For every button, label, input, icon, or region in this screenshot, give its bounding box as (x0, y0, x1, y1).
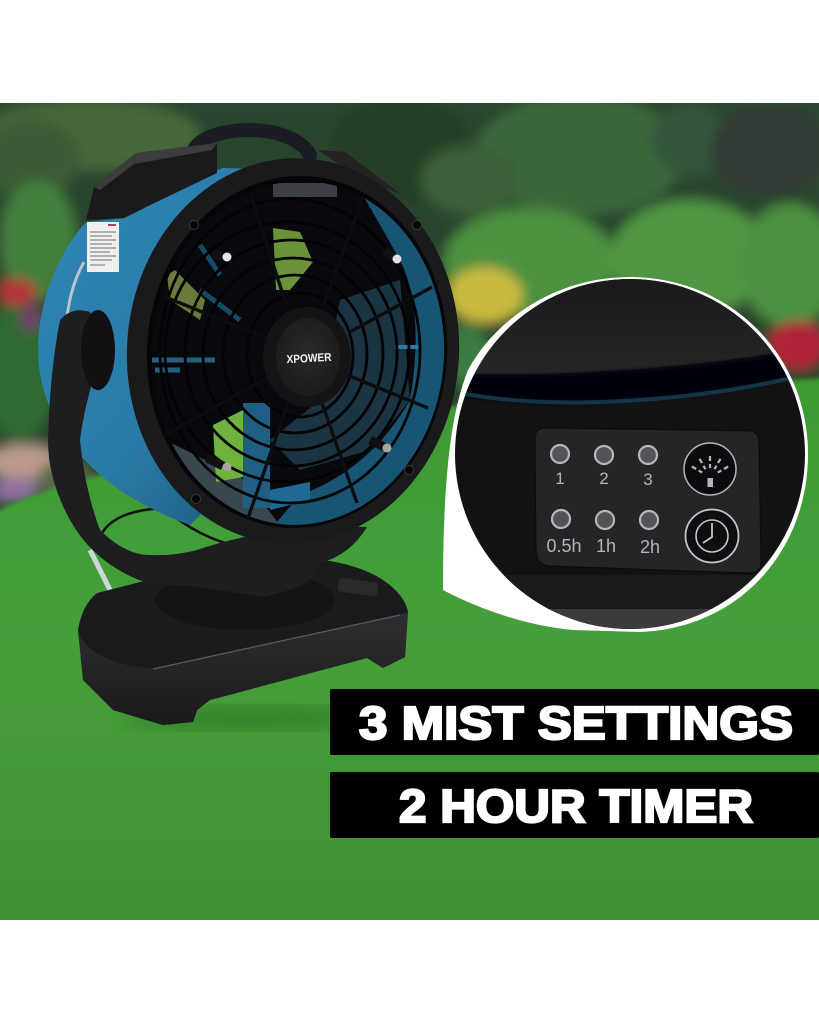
label bar: 2 hour timer (330, 772, 819, 838)
hub with XPOWER logo (263, 307, 351, 407)
arm pivot (81, 310, 115, 390)
label bar: 2 hour timer: 2 HOUR TIMER (399, 780, 753, 832)
top control housing (86, 143, 217, 220)
rating label (87, 222, 119, 272)
base (78, 560, 408, 725)
icon: mist button (684, 443, 736, 495)
mist nozzles (207, 250, 402, 472)
base display (337, 577, 379, 597)
timer indicators: 0.5h (546, 536, 582, 556)
timer indicators: 1h (596, 536, 616, 556)
mist level indicators (551, 445, 657, 489)
rear ridge (318, 150, 402, 195)
support arm (48, 310, 367, 597)
fan body: blue housing (38, 168, 320, 525)
screws (190, 220, 422, 504)
guard wires (160, 193, 432, 518)
label bar: 3 mist settings: 3 MIST SETTINGS (359, 697, 793, 749)
icon: clock button (686, 510, 738, 562)
zoom callout: white teardrop frame (443, 277, 808, 632)
fan guard (126, 158, 460, 537)
zoom callout: control panel close-up (450, 275, 810, 639)
turntable (155, 570, 335, 630)
mist level indicators: 1 (555, 469, 565, 488)
inner hose arc (66, 262, 84, 330)
mist level indicators: 3 (643, 470, 653, 489)
timer indicators (546, 510, 660, 557)
timer indicators: 2h (640, 537, 660, 557)
carry handle (194, 130, 310, 155)
mist level indicators: 2 (599, 469, 609, 488)
outer black ring (114, 147, 472, 555)
silver tube (90, 550, 110, 590)
power cords (102, 498, 225, 543)
base shadow on lawn (120, 709, 380, 727)
hub with XPOWER logo: XPOWER (286, 352, 332, 366)
fan interior (152, 183, 444, 525)
label bar: 3 mist settings (330, 689, 819, 755)
fan unit (38, 130, 472, 725)
touch panel (535, 428, 761, 573)
